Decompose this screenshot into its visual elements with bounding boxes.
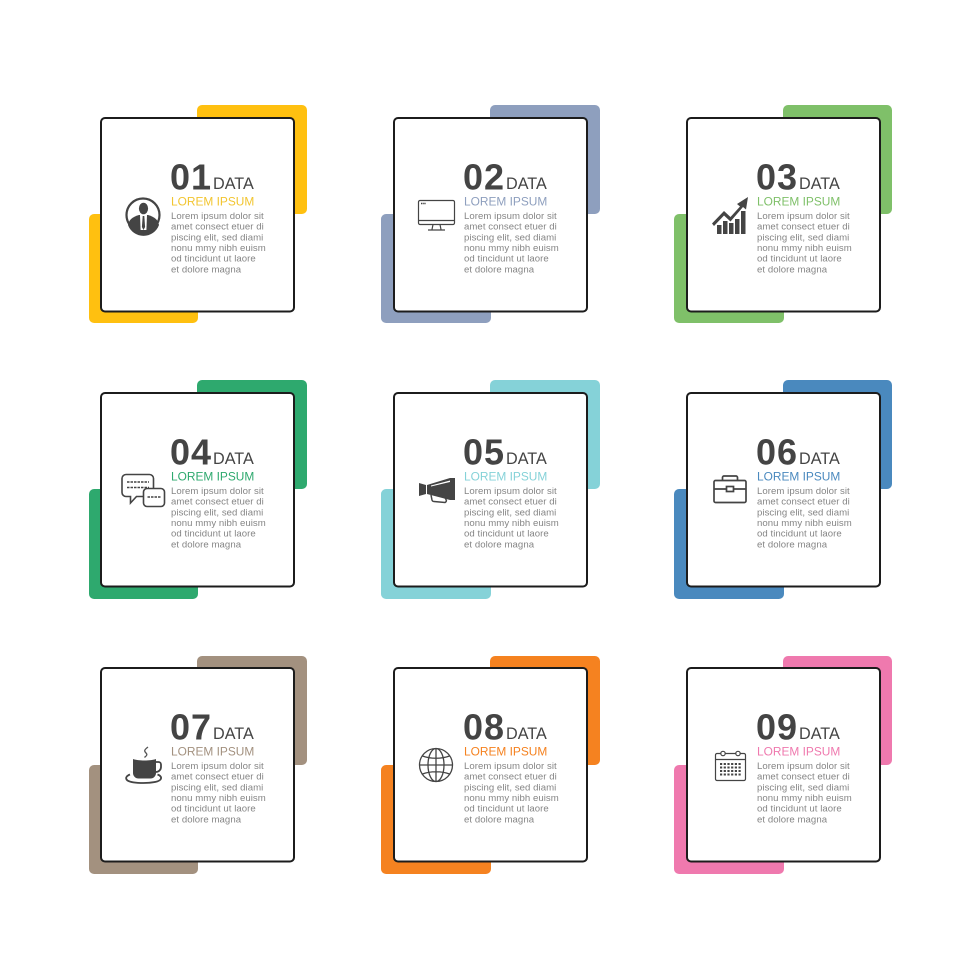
white panel [687, 393, 880, 586]
body text: piscing elit, sed diami [464, 232, 556, 243]
data label: DATA [799, 725, 840, 743]
back panel bottom left [381, 489, 491, 599]
body text: amet consect etuer di [757, 772, 850, 783]
card 07 [89, 656, 307, 874]
back panel bottom left [89, 765, 198, 874]
body text: nonu mmy nibh euism [171, 793, 266, 804]
back panel bottom left [89, 489, 198, 599]
white panel [101, 118, 294, 312]
subheading: LOREM IPSUM [757, 744, 840, 758]
back panel top right [490, 380, 600, 489]
body text: et dolore magna [757, 264, 828, 275]
body text: et dolore magna [171, 814, 242, 825]
white panel [687, 118, 880, 312]
back panel top right [197, 105, 307, 214]
number: 06 [756, 432, 798, 472]
data label: DATA [213, 450, 254, 468]
body text: nonu mmy nibh euism [464, 243, 559, 254]
body text: piscing elit, sed diami [464, 782, 556, 793]
body text: nonu mmy nibh euism [757, 793, 852, 804]
body text: Lorem ipsum dolor sit [464, 211, 557, 222]
body text: nonu mmy nibh euism [757, 243, 852, 254]
subheading: LOREM IPSUM [757, 194, 840, 208]
body text: od tincidunt ut laore [171, 804, 256, 815]
subheading: LOREM IPSUM [464, 194, 547, 208]
body text: amet consect etuer di [171, 222, 264, 233]
data label: DATA [799, 175, 840, 193]
back panel bottom left [674, 214, 784, 323]
body text: nonu mmy nibh euism [171, 518, 266, 529]
body text: nonu mmy nibh euism [464, 518, 559, 529]
white panel [101, 393, 294, 586]
back panel bottom left [381, 214, 491, 323]
card 09 [674, 656, 892, 874]
body text: od tincidunt ut laore [171, 254, 256, 265]
body text: od tincidunt ut laore [464, 529, 549, 540]
subheading: LOREM IPSUM [171, 470, 254, 484]
body text: amet consect etuer di [171, 772, 264, 783]
body text: amet consect etuer di [757, 222, 850, 233]
body text: piscing elit, sed diami [757, 232, 849, 243]
body text: Lorem ipsum dolor sit [171, 486, 264, 497]
data label: DATA [506, 725, 547, 743]
body text: piscing elit, sed diami [171, 232, 263, 243]
body text: amet consect etuer di [464, 222, 557, 233]
body text: piscing elit, sed diami [757, 507, 849, 518]
body text: piscing elit, sed diami [757, 782, 849, 793]
data label: DATA [213, 175, 254, 193]
data label: DATA [506, 450, 547, 468]
card 01 [89, 105, 307, 323]
card 02 [381, 105, 600, 323]
body text: et dolore magna [171, 539, 242, 550]
back panel top right [783, 105, 892, 214]
body text: et dolore magna [757, 814, 828, 825]
body text: Lorem ipsum dolor sit [171, 211, 264, 222]
back panel bottom left [89, 214, 198, 323]
icon: rising chart [712, 197, 748, 234]
body text: nonu mmy nibh euism [464, 793, 559, 804]
icon: briefcase [714, 476, 746, 502]
body text: amet consect etuer di [464, 772, 557, 783]
back panel top right [490, 105, 600, 214]
card 03 [674, 105, 892, 323]
body text: Lorem ipsum dolor sit [757, 211, 850, 222]
icon: globe [420, 748, 452, 782]
icon: chat bubbles [122, 474, 164, 506]
white panel [394, 118, 587, 312]
body text: od tincidunt ut laore [757, 804, 842, 815]
back panel bottom left [674, 765, 784, 874]
white panel [394, 393, 587, 586]
subheading: LOREM IPSUM [171, 744, 254, 758]
body text: od tincidunt ut laore [757, 254, 842, 265]
back panel top right [783, 656, 892, 765]
back panel top right [783, 380, 892, 489]
data label: DATA [213, 725, 254, 743]
body text: Lorem ipsum dolor sit [757, 761, 850, 772]
card 05 [381, 380, 600, 599]
back panel bottom left [674, 489, 784, 599]
subheading: LOREM IPSUM [171, 194, 254, 208]
body text: amet consect etuer di [757, 497, 850, 508]
body text: Lorem ipsum dolor sit [171, 761, 264, 772]
icon: megaphone [419, 478, 455, 502]
white panel [101, 668, 294, 862]
body text: nonu mmy nibh euism [171, 243, 266, 254]
body text: Lorem ipsum dolor sit [464, 761, 557, 772]
body text: od tincidunt ut laore [171, 529, 256, 540]
data label: DATA [506, 175, 547, 193]
body text: piscing elit, sed diami [464, 507, 556, 518]
white panel [394, 668, 587, 862]
body text: od tincidunt ut laore [757, 529, 842, 540]
body text: amet consect etuer di [171, 497, 264, 508]
body text: piscing elit, sed diami [171, 782, 263, 793]
number: 01 [170, 156, 212, 198]
number: 08 [463, 706, 505, 748]
number: 07 [170, 706, 212, 748]
card 04 [89, 380, 307, 599]
card 08 [381, 656, 600, 874]
body text: od tincidunt ut laore [464, 804, 549, 815]
body text: et dolore magna [757, 539, 828, 550]
body text: nonu mmy nibh euism [757, 518, 852, 529]
subheading: LOREM IPSUM [757, 470, 840, 484]
card 06 [674, 380, 892, 599]
body text: amet consect etuer di [464, 497, 557, 508]
number: 02 [463, 156, 505, 198]
body text: piscing elit, sed diami [171, 507, 263, 518]
back panel top right [490, 656, 600, 765]
body text: et dolore magna [464, 539, 535, 550]
number: 05 [463, 432, 505, 472]
data label: DATA [799, 450, 840, 468]
body text: Lorem ipsum dolor sit [757, 486, 850, 497]
body text: od tincidunt ut laore [464, 254, 549, 265]
back panel top right [197, 656, 307, 765]
number: 09 [756, 706, 798, 748]
icon: calendar [716, 751, 746, 780]
number: 04 [170, 432, 212, 472]
icon: monitor [418, 200, 454, 230]
body text: et dolore magna [464, 264, 535, 275]
white panel [687, 668, 880, 862]
body text: Lorem ipsum dolor sit [464, 486, 557, 497]
icon: businessman [126, 198, 160, 236]
body text: et dolore magna [464, 814, 535, 825]
body text: et dolore magna [171, 264, 242, 275]
subheading: LOREM IPSUM [464, 744, 547, 758]
back panel bottom left [381, 765, 491, 874]
back panel top right [197, 380, 307, 489]
icon: coffee cup [126, 747, 161, 783]
subheading: LOREM IPSUM [464, 470, 547, 484]
number: 03 [756, 156, 798, 198]
